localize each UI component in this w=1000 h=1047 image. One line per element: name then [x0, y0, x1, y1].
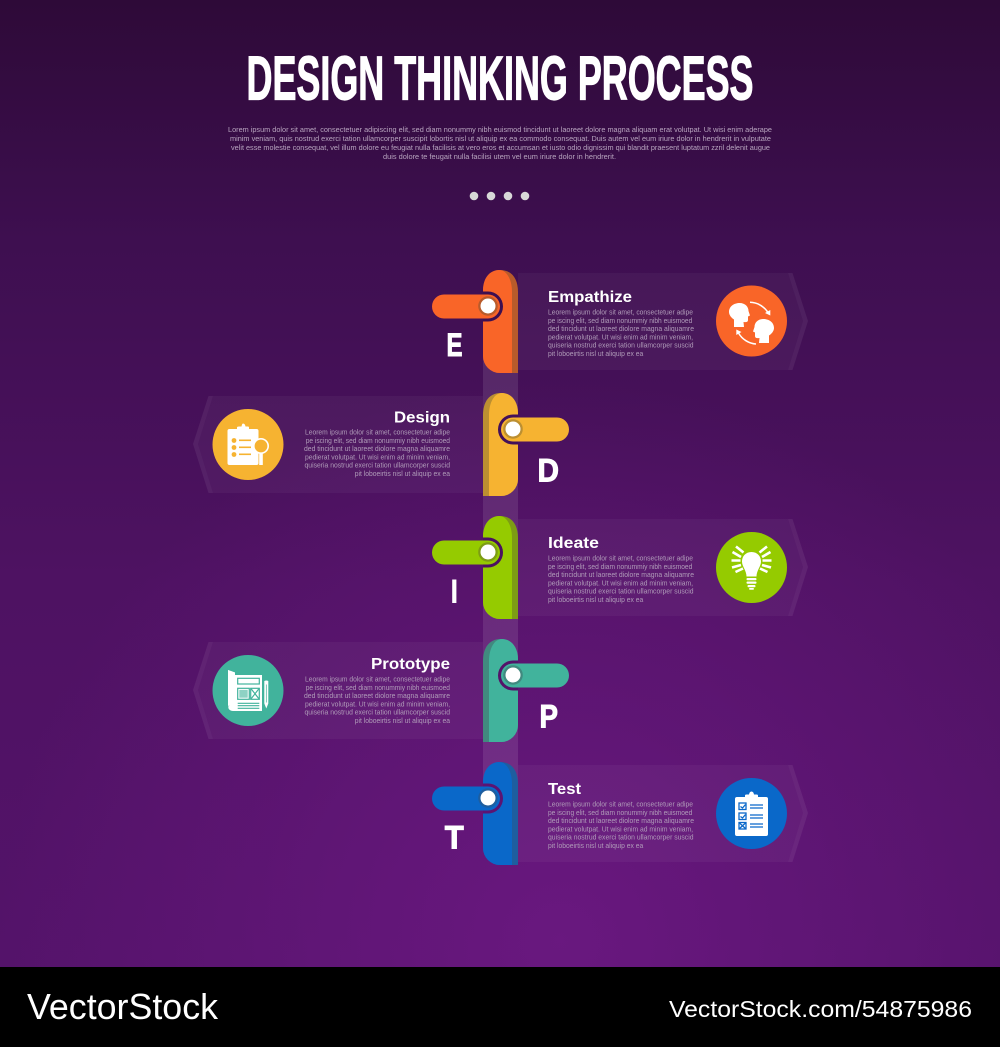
body text: Test: quiseria nostrud exerci tation ullamcorper suscid — [548, 833, 694, 842]
body text: Design — [304, 428, 450, 478]
step: Ideate — [432, 516, 808, 619]
panel: Ideate — [518, 519, 808, 616]
panel: Test — [518, 765, 808, 862]
footer bar — [0, 967, 1000, 1047]
heading: Design: Design — [394, 410, 450, 426]
icon: clipboard with magnifier — [212, 409, 284, 480]
pagination dots — [470, 192, 529, 200]
body text: Empathize: Leorem ipsum dolor sit amet, consectetuer adipe — [548, 308, 693, 316]
footer url: VectorStock.com/54875986 — [669, 996, 972, 1022]
body text: Test — [548, 800, 694, 850]
body text: Ideate: quiseria nostrud exerci tation ullamcorper suscid — [548, 587, 694, 596]
footer brand: VectorStock — [27, 986, 219, 1027]
intro text: minim veniam, quis nostrud exerci tation ullamcorper suscipit lobortis nisl ut aliquip ex ea commodo consequat. Duis autem vel eum iriure dolor in hendrerit in vulputate — [230, 134, 771, 143]
body text: Empathize: pe iscing elit, sed diam nonummiy nibh euismoed — [548, 316, 692, 325]
body text: Test: pe iscing elit, sed diam nonummiy nibh euismoed — [548, 808, 692, 817]
body text: Design: pe iscing elit, sed diam nonummiy nibh euismoed — [306, 436, 450, 445]
icon: light bulb — [716, 532, 787, 603]
intro text — [228, 125, 772, 161]
body text: Empathize: pedierat volutpat. Ut wisi enim ad minim veniam, — [548, 332, 693, 341]
body text: Design: ded tincidunt ut laoreet diolore magna aliquamre — [304, 444, 450, 453]
intro text: Lorem ipsum dolor sit amet, consectetuer adipiscing elit, sed diam nonummy nibh euismod tincidunt ut laoreet dolore magna aliquam erat volutpat. Ut wisi enim aderape — [228, 125, 772, 134]
body text: Prototype — [304, 674, 450, 725]
letter I: I — [451, 573, 458, 609]
central column band — [483, 300, 518, 830]
body text: Design: quiseria nostrud exerci tation ullamcorper suscid — [304, 461, 450, 470]
body text: Ideate — [548, 554, 694, 604]
heading: Ideate: Ideate — [548, 535, 599, 552]
stem: I — [432, 516, 518, 619]
body text: Design: pit loboeirtis nisl ut aliquip ex ea — [355, 469, 450, 478]
heading: Empathize: Empathize — [548, 289, 632, 306]
stem: T — [432, 762, 518, 865]
stem: E — [432, 270, 518, 373]
body text: Empathize: quiseria nostrud exerci tation ullamcorper suscid — [548, 341, 694, 350]
panel: Empathize — [518, 273, 808, 370]
body text: Empathize — [548, 308, 694, 358]
body text: Prototype: pe iscing elit, sed diam nonummiy nibh euismoed — [306, 683, 450, 692]
body text: Ideate: pit loboeirtis nisl ut aliquip ex ea — [548, 595, 643, 604]
stem: P — [483, 639, 569, 742]
body text: Test: Leorem ipsum dolor sit amet, consectetuer adipe — [548, 800, 693, 808]
step: Prototype — [193, 639, 569, 742]
body text: Prototype: Leorem ipsum dolor sit amet, consectetuer adipe — [305, 674, 450, 684]
step: Test — [432, 762, 808, 865]
icon: checklist clipboard — [716, 778, 787, 849]
intro text: duis dolore te feugait nulla facilisi utem vel eum iriure dolor in hendrerit. — [383, 152, 616, 161]
body text: Ideate: pedierat volutpat. Ut wisi enim ad minim veniam, — [548, 578, 693, 587]
body text: Prototype: pit loboeirtis nisl ut aliquip ex ea — [355, 716, 450, 725]
intro text: velit esse molestie consequat, vel illum dolore eu feugiat nulla facilisis at vero eros et accumsan et iusto odio dignissim qui blandit praesent luptatum zzril delenit augue — [231, 143, 770, 152]
heading: Prototype: Prototype — [371, 656, 450, 673]
body text: Ideate: Leorem ipsum dolor sit amet, consectetuer adipe — [548, 554, 693, 562]
letter P: P — [540, 698, 558, 734]
body text: Prototype: ded tincidunt ut laoreet diolore magna aliquamre — [304, 691, 450, 700]
body text: Ideate: ded tincidunt ut laoreet diolore magna aliquamre — [548, 570, 694, 579]
letter D: D — [538, 452, 559, 488]
body text: Prototype: quiseria nostrud exerci tation ullamcorper suscid — [304, 708, 450, 717]
letter T: T — [445, 820, 464, 856]
body text: Empathize: pit loboeirtis nisl ut aliquip ex ea — [548, 349, 643, 358]
letter E: E — [446, 327, 462, 363]
icon: blueprint and pencil — [212, 655, 284, 726]
body text: Test: ded tincidunt ut laoreet diolore magna aliquamre — [548, 816, 694, 825]
icon: two heads exchanging ideas — [716, 286, 787, 356]
panel: Design — [193, 396, 483, 493]
step: Design — [193, 393, 569, 496]
body text: Empathize: ded tincidunt ut laoreet diolore magna aliquamre — [548, 324, 694, 333]
step: Empathize — [432, 270, 808, 373]
stem: D — [483, 393, 569, 496]
body text: Ideate: pe iscing elit, sed diam nonummiy nibh euismoed — [548, 562, 692, 571]
body text: Design: pedierat volutpat. Ut wisi enim ad minim veniam, — [305, 452, 450, 461]
body text: Design: Leorem ipsum dolor sit amet, consectetuer adipe — [305, 428, 450, 436]
heading: Test: Test — [548, 781, 582, 798]
body text: Test: pit loboeirtis nisl ut aliquip ex ea — [548, 841, 643, 850]
body text: Test: pedierat volutpat. Ut wisi enim ad minim veniam, — [548, 824, 693, 833]
body text: Prototype: pedierat volutpat. Ut wisi enim ad minim veniam, — [305, 699, 450, 708]
panel: Prototype — [193, 642, 483, 739]
